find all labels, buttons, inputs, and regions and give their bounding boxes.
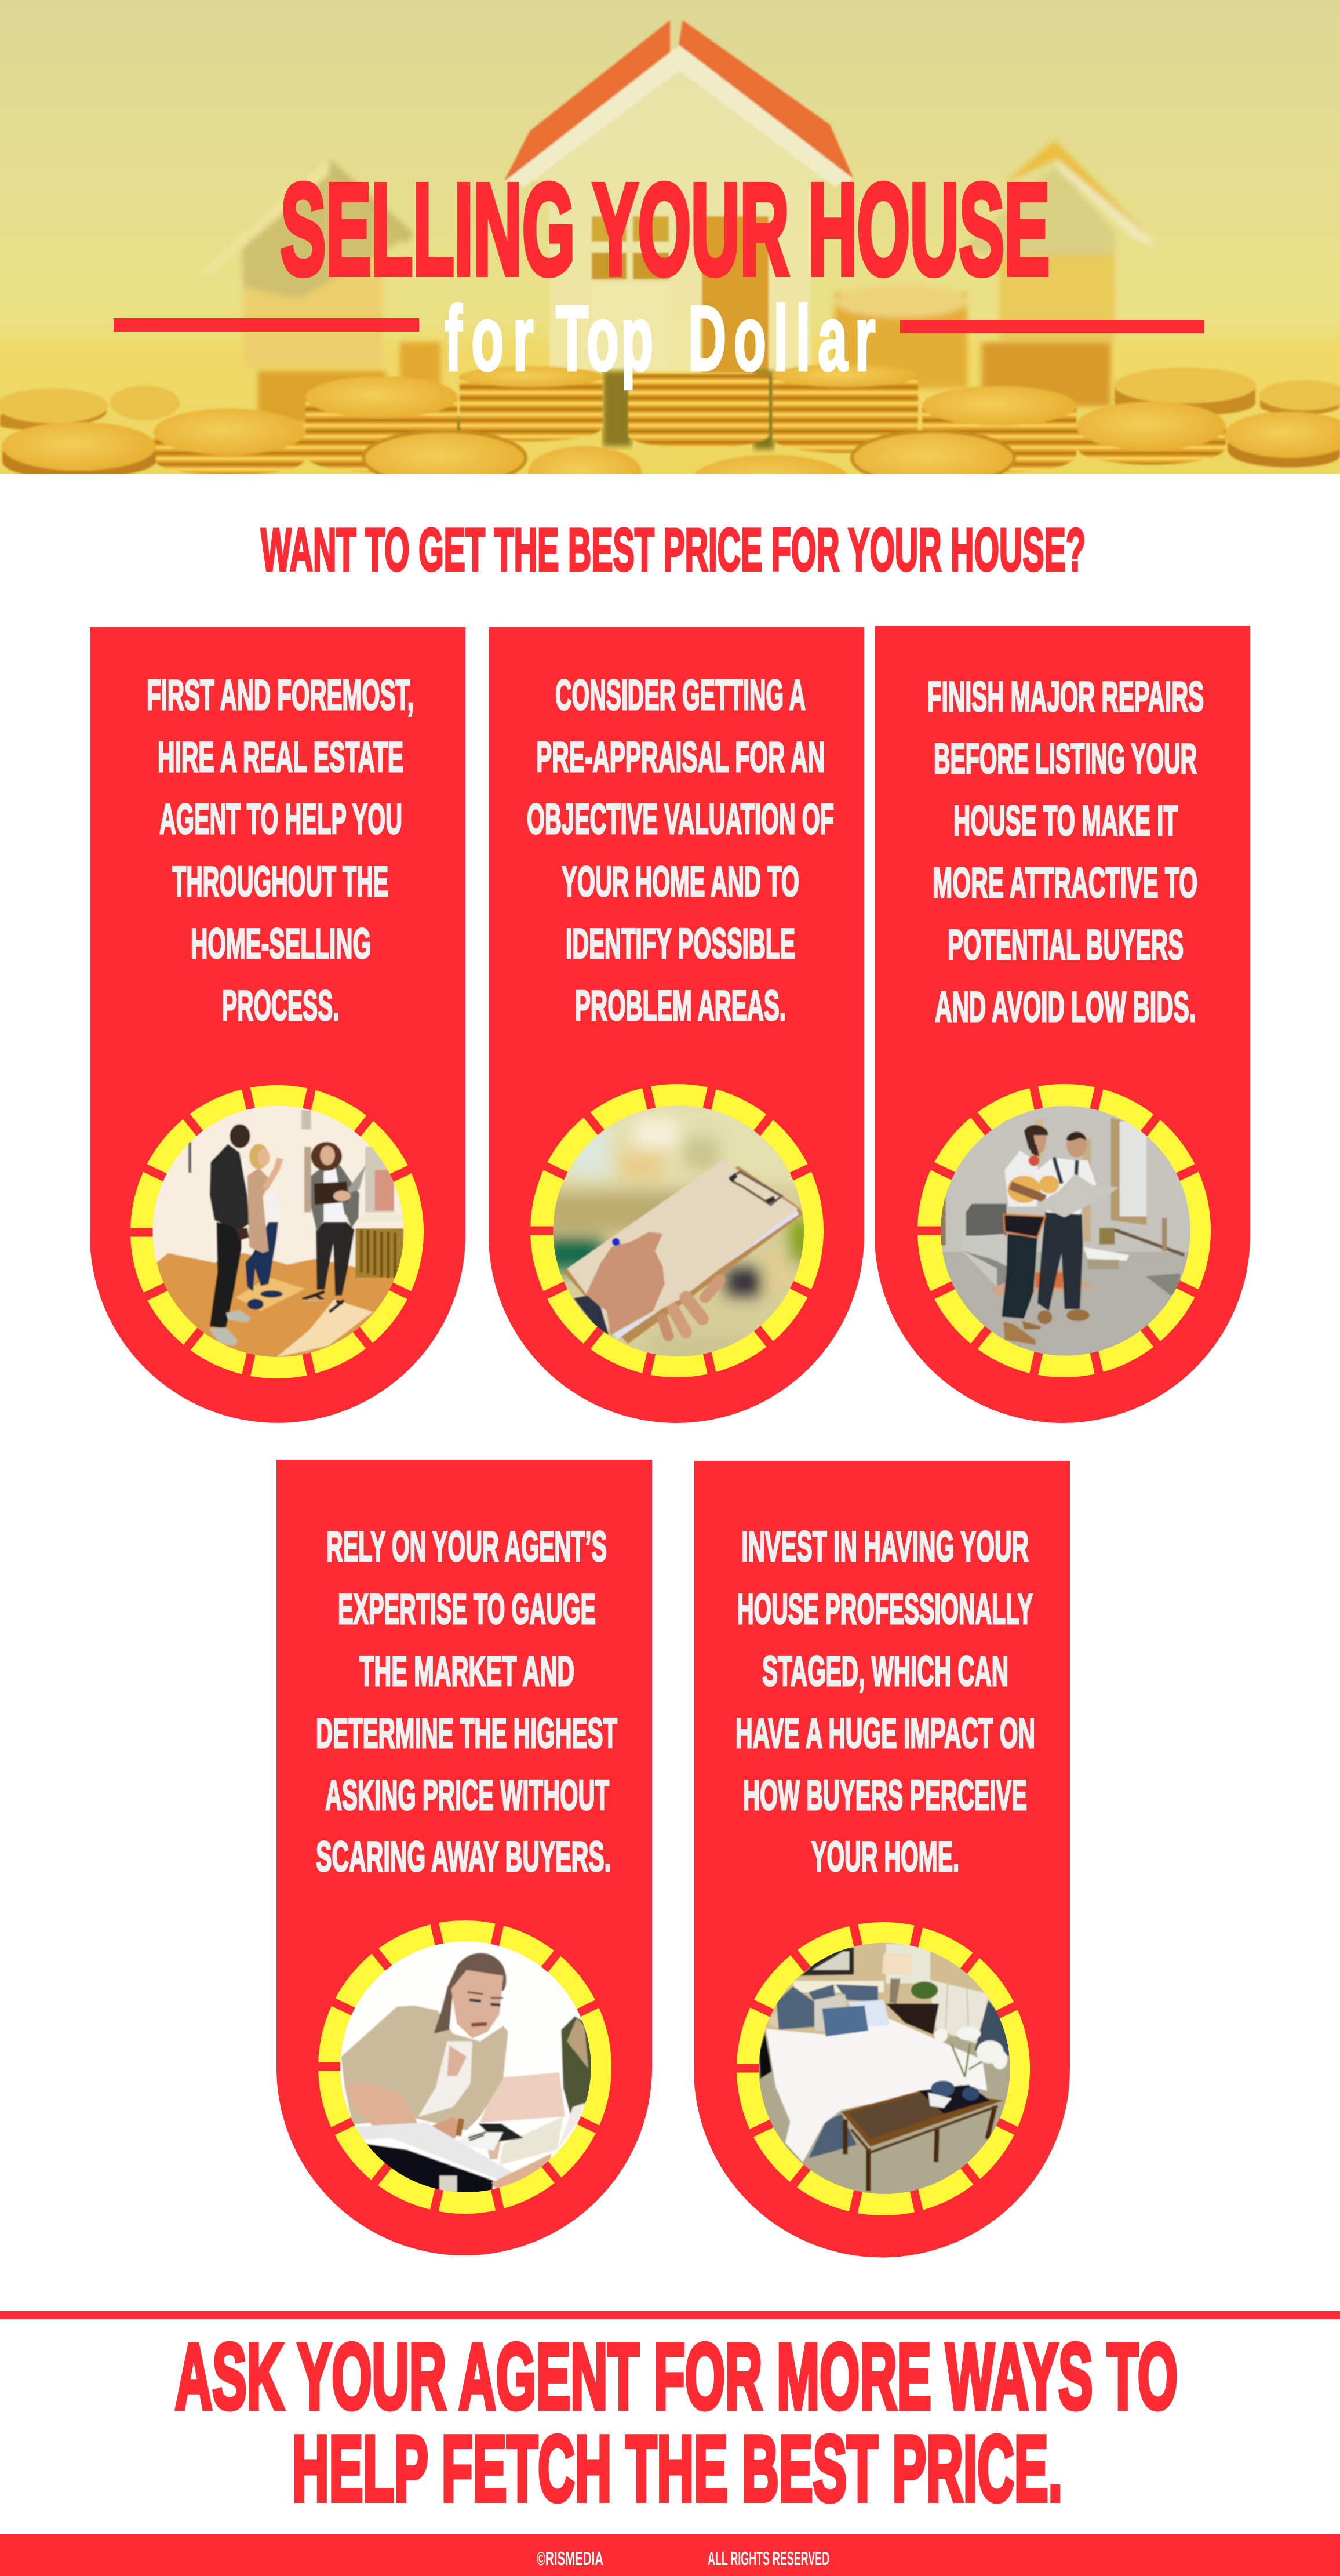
- text: tip 5: INVEST IN HAVING YOUR: [741, 1523, 1029, 1570]
- panel: tip 4 rely on agent: [276, 1460, 652, 2255]
- text: tip 5: YOUR HOME.: [811, 1833, 959, 1880]
- left house: [201, 159, 414, 368]
- text: tip 5: HAVE A HUGE IMPACT ON: [735, 1710, 1035, 1757]
- text: tip 4: SCARING AWAY BUYERS.: [316, 1833, 611, 1880]
- footer band: ALL RIGHTS RESERVED: [708, 2548, 829, 2569]
- hero banner photo: houses on gold coins: [0, 0, 1340, 507]
- central house: [504, 20, 854, 373]
- photo: agent with couple in empty room: [152, 1106, 404, 1357]
- text: tip 5: HOW BUYERS PERCEIVE: [743, 1772, 1027, 1819]
- text: tip 5: STAGED, WHICH CAN: [762, 1648, 1008, 1695]
- divider bar: [0, 2311, 1340, 2319]
- text: tip 4: EXPERTISE TO GAUGE: [338, 1586, 596, 1633]
- closing call to action: [175, 2324, 1178, 2521]
- text: tip 1: AGENT TO HELP YOU: [159, 796, 402, 843]
- text: tip 2: PROBLEM AREAS.: [575, 983, 786, 1029]
- text: tip 1: HOME-SELLING: [191, 920, 371, 967]
- subtitle with side bars: [114, 288, 1204, 390]
- coin stacks: [0, 364, 1340, 474]
- text: tip 2: YOUR HOME AND TO: [562, 858, 799, 905]
- text: tip 2: CONSIDER GETTING A: [555, 672, 806, 719]
- text: tip 5: [735, 1523, 1035, 1880]
- photo: staged bedroom: [759, 1943, 1010, 2194]
- icon ring: tip 4: [314, 1917, 606, 2216]
- panel: tip 3 finish repairs: [875, 626, 1250, 1423]
- text: tip 1: [147, 672, 414, 1029]
- right house: [962, 140, 1153, 344]
- photo: hands writing on clipboard: [553, 1105, 804, 1356]
- subtitle with side bars: Top: [556, 288, 672, 390]
- photo: two contractors reading plans: [941, 1106, 1190, 1356]
- text: tip 2: [527, 672, 834, 1029]
- text: tip 1: HIRE A REAL ESTATE: [158, 734, 403, 781]
- subtitle with side bars: for: [445, 288, 566, 390]
- text: tip 4: THE MARKET AND: [359, 1648, 574, 1695]
- text: tip 2: IDENTIFY POSSIBLE: [566, 920, 795, 967]
- panel: tip 1 hire an agent: [90, 627, 465, 1423]
- footer band: [0, 2534, 1340, 2576]
- text: tip 2: OBJECTIVE VALUATION OF: [527, 796, 834, 843]
- text: tip 2: PRE-APPRAISAL FOR AN: [536, 734, 825, 781]
- panel: tip 2 pre-appraisal: [489, 627, 864, 1423]
- text: tip 5: HOUSE PROFESSIONALLY: [737, 1586, 1033, 1633]
- text: tip 4: [316, 1523, 617, 1880]
- icon ring: tip 3: [913, 1081, 1205, 1380]
- text: tip 1: THROUGHOUT THE: [172, 858, 388, 905]
- text: tip 1: PROCESS.: [222, 983, 339, 1029]
- icon ring: tip 5: [733, 1919, 1025, 2218]
- text: tip 4: ASKING PRICE WITHOUT: [325, 1772, 609, 1819]
- rear coin stacks: [258, 285, 1110, 423]
- icon ring: tip 2: [526, 1081, 818, 1380]
- text: tip 4: RELY ON YOUR AGENT’S: [326, 1523, 607, 1570]
- subtitle with side bars: Dollar: [688, 288, 883, 390]
- dark gaps: [603, 371, 632, 446]
- icon ring: tip 1: [125, 1083, 417, 1382]
- footer band: ©RISMEDIA: [537, 2548, 603, 2569]
- photo: agent reviewing documents: [340, 1941, 591, 2192]
- panel: tip 5 professional staging: [694, 1461, 1070, 2257]
- text: tip 3: [927, 674, 1204, 1031]
- text: tip 1: FIRST AND FOREMOST,: [147, 672, 414, 719]
- text: tip 4: DETERMINE THE HIGHEST: [316, 1710, 617, 1757]
